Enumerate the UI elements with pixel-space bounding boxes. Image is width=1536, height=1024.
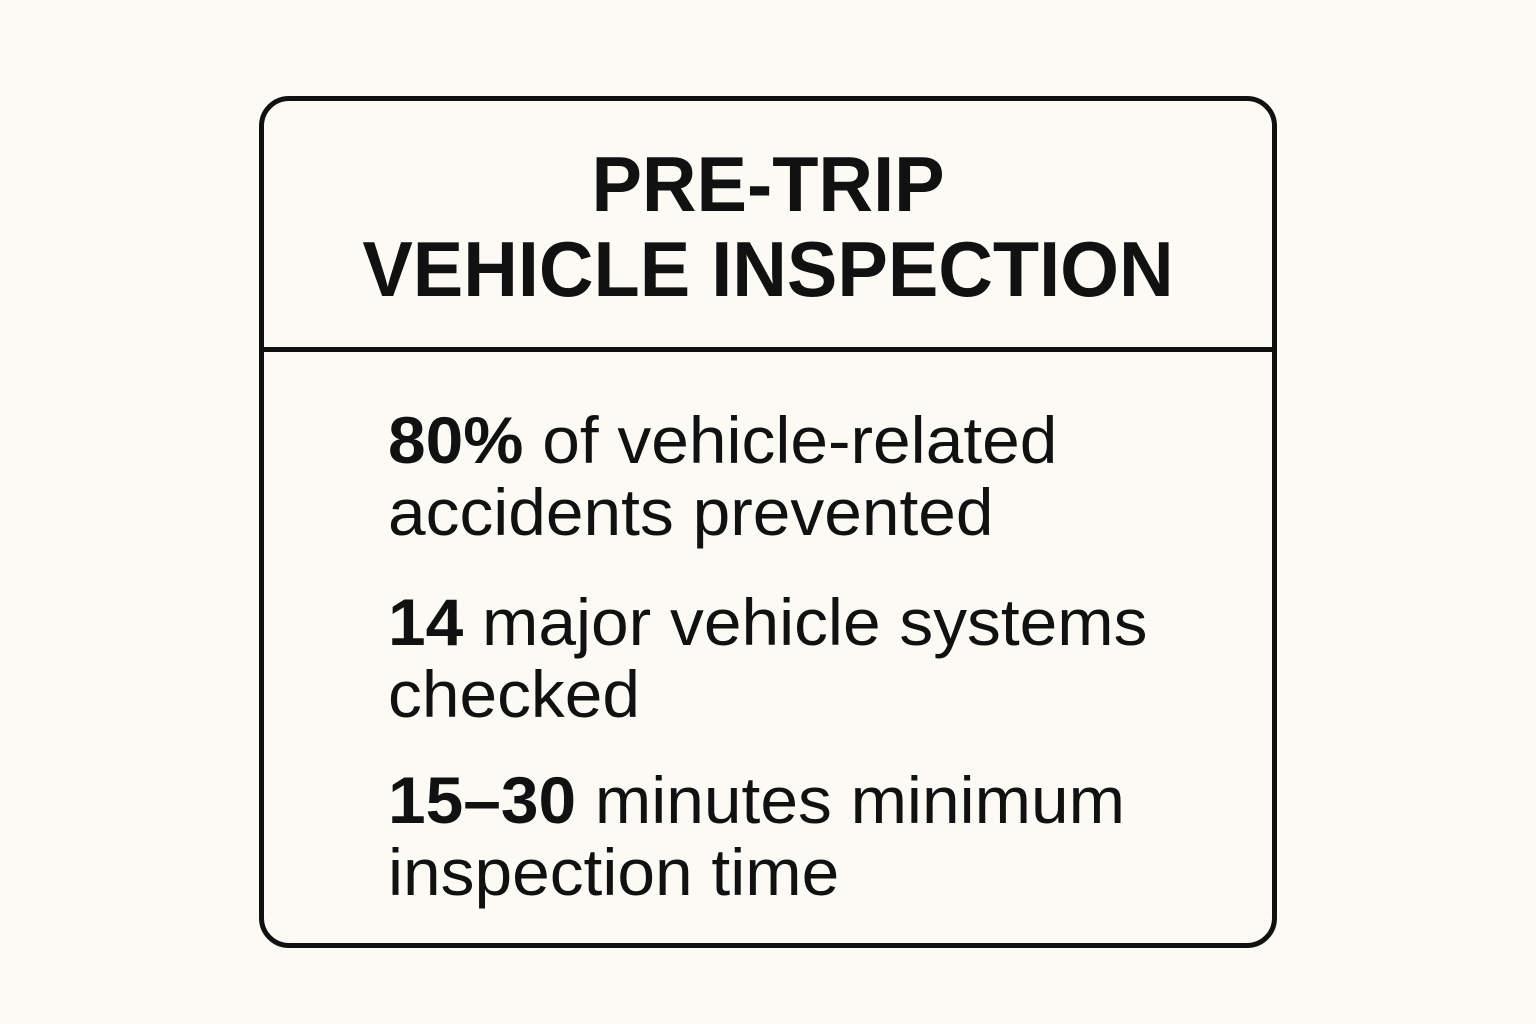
- stat: accidents prevented: 80% of vehicle-related: [388, 403, 1057, 477]
- stat: inspection time: 15–30 minutes minimum: [388, 763, 1125, 837]
- stat: accidents prevented: accidents prevented: [388, 475, 993, 549]
- stat: systems checked: 14 major vehicle systems: [388, 585, 1147, 659]
- panel: inspection card: [259, 96, 1277, 948]
- stat: systems checked: checked: [388, 657, 640, 731]
- title line 1: PRE-TRIP: [591, 140, 945, 228]
- stat: inspection time: inspection time: [388, 835, 839, 909]
- title line 2: VEHICLE INSPECTION: [362, 225, 1174, 313]
- stat: accidents prevented: [388, 403, 1057, 549]
- stat: inspection time: [388, 763, 1125, 909]
- stat: systems checked: [388, 585, 1147, 731]
- title header: [264, 101, 1272, 352]
